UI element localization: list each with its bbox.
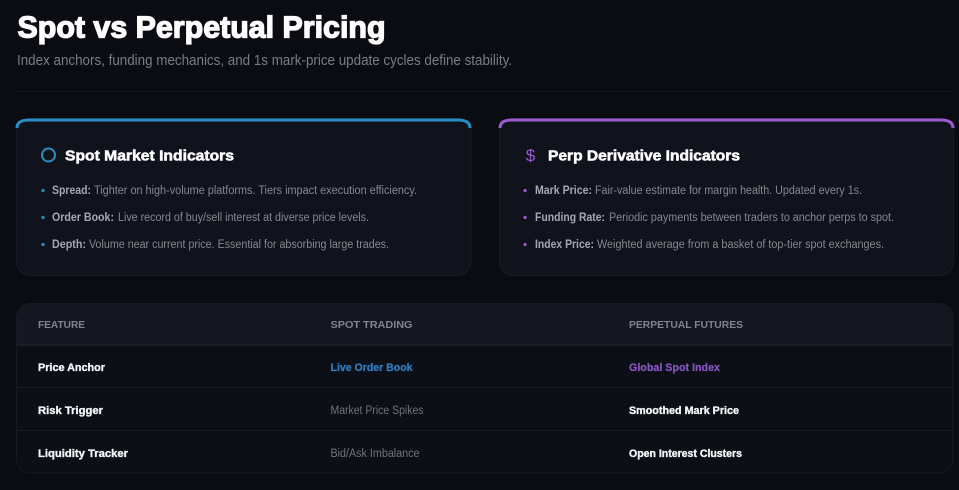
list: spot indicators bbox=[41, 185, 417, 251]
heading: perp derivative indicators: Perp Derivative Indicators bbox=[548, 148, 740, 164]
list: perp indicators: Index Price: bbox=[535, 239, 594, 251]
heading: spot market indicators: Spot Market Indicators bbox=[65, 148, 234, 164]
table row: price anchor: Price Anchor bbox=[38, 362, 106, 374]
list: perp indicators: Periodic payments between traders to anchor perps to spot. bbox=[609, 212, 894, 224]
table header row: SPOT TRADING bbox=[330, 319, 412, 331]
list: spot indicators: Spread: bbox=[52, 185, 91, 197]
subtitle: Index anchors, funding mechanics, and 1s mark-price update cycles define stability. bbox=[17, 52, 512, 69]
table row: risk trigger bbox=[38, 405, 739, 417]
list: spot indicators: Depth: bbox=[52, 239, 86, 251]
list: perp indicators bbox=[523, 185, 894, 251]
table row: price anchor: Live Order Book bbox=[330, 362, 413, 374]
table row: price anchor: Global Spot Index bbox=[629, 362, 721, 374]
table row: liquidity tracker: Bid/Ask Imbalance bbox=[330, 448, 420, 460]
table header row: FEATURE bbox=[38, 319, 85, 331]
title: Spot vs Perpetual Pricing bbox=[18, 10, 386, 44]
list: perp indicators: Funding Rate: bbox=[535, 212, 605, 224]
table row: risk trigger: Market Price Spikes bbox=[330, 405, 424, 417]
icon: dollar sign: $ bbox=[526, 146, 536, 165]
panel: perp derivative indicators bbox=[500, 118, 954, 276]
table row: liquidity tracker bbox=[38, 448, 742, 460]
comparison table bbox=[16, 304, 953, 473]
list: perp indicators: Weighted average from a basket of top-tier spot exchanges. bbox=[597, 239, 884, 251]
table row: liquidity tracker: Liquidity Tracker bbox=[38, 448, 129, 460]
table row: risk trigger: Smoothed Mark Price bbox=[629, 405, 739, 417]
icon: circle bbox=[42, 148, 55, 162]
panel: spot market indicators bbox=[16, 118, 471, 276]
table row: risk trigger: Risk Trigger bbox=[38, 405, 104, 417]
table header row: PERPETUAL FUTURES bbox=[629, 319, 743, 331]
table row: liquidity tracker: Open Interest Clusters bbox=[629, 448, 742, 460]
table row: price anchor bbox=[38, 362, 721, 374]
table header row bbox=[38, 319, 743, 331]
list: spot indicators: Live record of buy/sell interest at diverse price levels. bbox=[118, 212, 369, 224]
list: spot indicators: Tighter on high-volume platforms. Tiers impact execution efficiency. bbox=[94, 185, 417, 197]
list: spot indicators: Volume near current price. Essential for absorbing large trades. bbox=[89, 239, 389, 251]
list: spot indicators: Order Book: bbox=[52, 212, 114, 224]
list: perp indicators: Mark Price: bbox=[535, 185, 592, 197]
list: perp indicators: Fair-value estimate for margin health. Updated every 1s. bbox=[595, 185, 862, 197]
